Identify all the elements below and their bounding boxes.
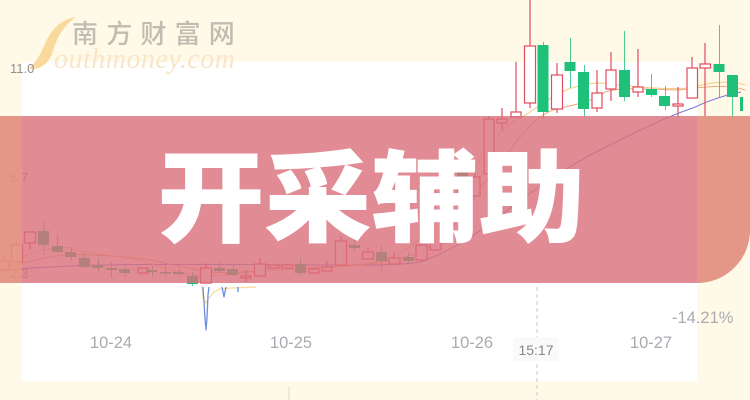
watermark: Southmoney logo: outhmoney.com — [54, 44, 235, 75]
white chart panel — [22, 62, 697, 381]
crosshair and time label: 15:17 — [518, 342, 554, 358]
axis labels — [10, 61, 34, 281]
pink title band — [0, 116, 750, 283]
candlesticks: rising (hollow red) — [0, 0, 710, 283]
axis labels: 6.7 — [10, 170, 28, 185]
date axis: 10-26 — [451, 334, 493, 352]
axis labels: 11.0 — [10, 61, 34, 76]
crosshair and time label — [289, 287, 559, 400]
axis labels: 2.3 — [10, 266, 28, 281]
title: 开采辅助 — [158, 145, 586, 255]
date axis: 10-25 — [270, 334, 312, 352]
percentage label: -14.21% — [672, 309, 734, 327]
candlesticks: falling (solid green) — [38, 25, 743, 286]
date axis: 10-24 — [90, 334, 132, 352]
date axis — [90, 334, 672, 352]
date axis: 10-27 — [630, 334, 672, 352]
watermark: Southmoney logo: 南方财富网 — [72, 19, 243, 49]
watermark: Southmoney logo — [28, 17, 243, 75]
intraday spike lines — [202, 286, 256, 330]
band edge tint — [0, 116, 750, 283]
moving average lines — [0, 82, 745, 276]
